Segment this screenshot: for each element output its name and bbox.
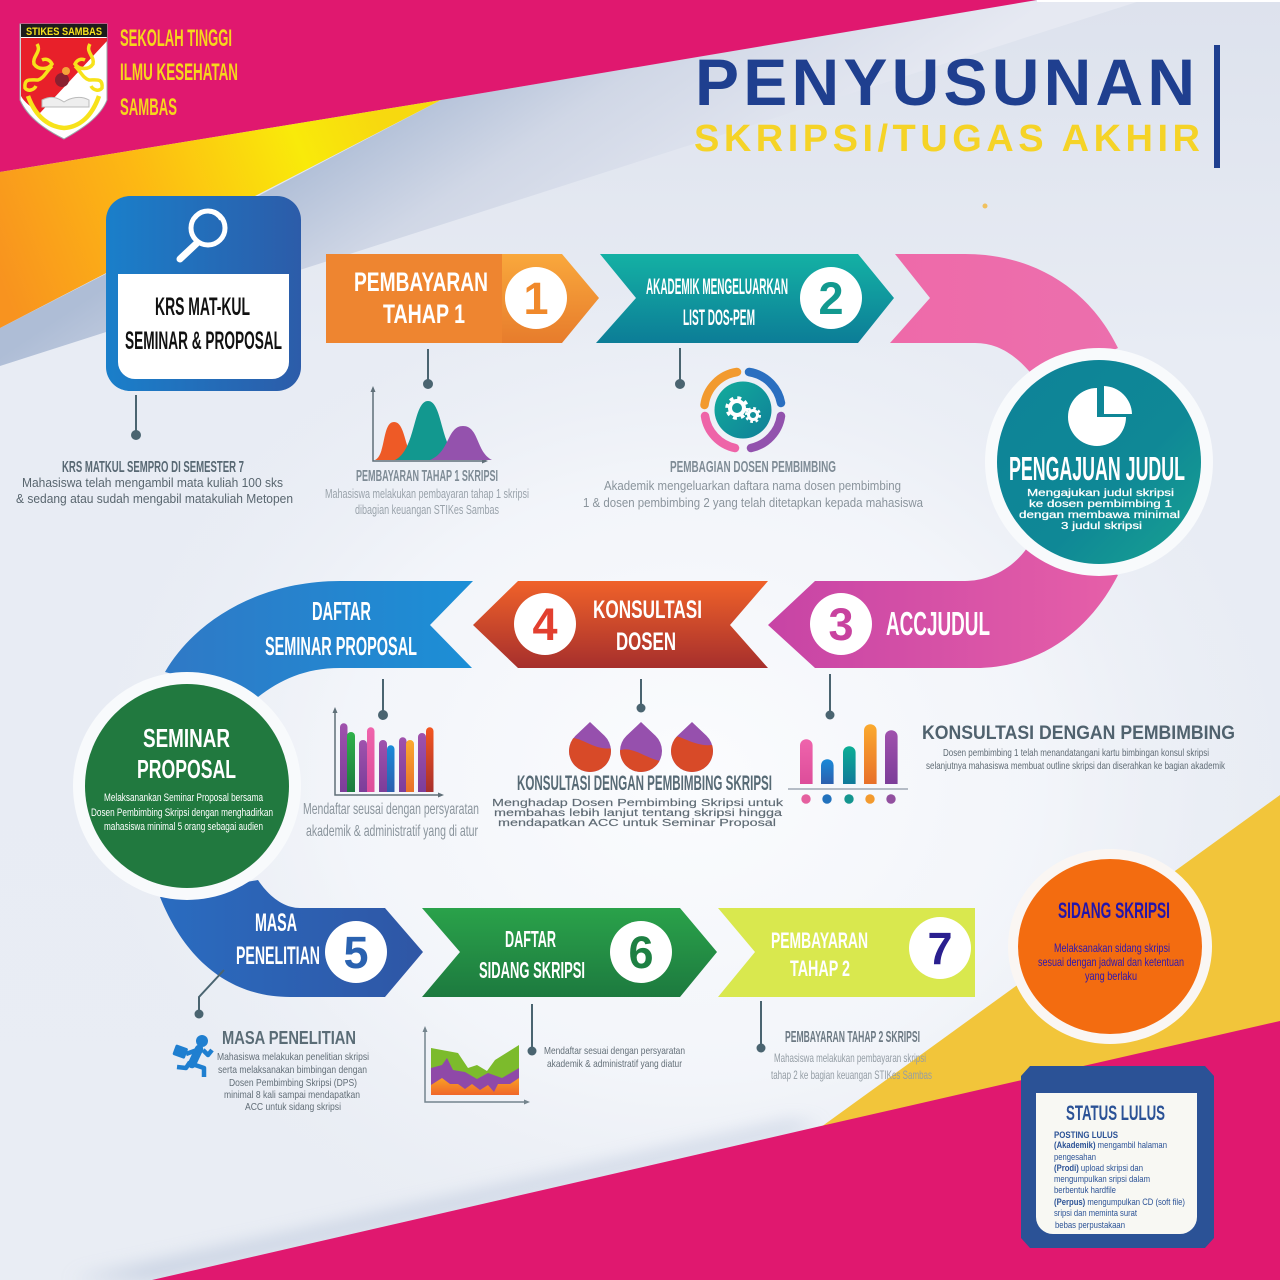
panel: status lulus: (Akademik) mengambil halaman: [1054, 1140, 1167, 1151]
text: pembayaran tahap 2: Mahasiswa melakukan pembayaran skripsi: [774, 1051, 926, 1065]
bottom yellow wedge: [821, 795, 1280, 1127]
circle: seminar proposal: Dosen Pembimbing Skripsi dengan menghadirkan: [91, 807, 273, 819]
text: masa penelitian: serta melaksanakan bimbingan dengan: [218, 1064, 367, 1076]
ribbon: step 5: PENELITIAN: [236, 942, 320, 970]
top yellow wedge: [0, 100, 441, 328]
arrow: step 4: 4: [532, 599, 558, 650]
text: pembayaran tahap 2: PEMBAYARAN TAHAP 2 SKRIPSI: [785, 1029, 920, 1046]
arrow: step 4: KONSULTASI: [593, 596, 702, 624]
arrow: step 2: 2: [818, 273, 844, 324]
circle: pengajuan judul: ke dosen pembimbing 1: [1029, 499, 1173, 510]
text: pembagian dosen pembimbing: [583, 459, 924, 510]
chart: stacked area: [422, 1004, 536, 1104]
school name: SAMBAS: [120, 94, 177, 121]
text: konsultasi dengan pembimbing skripsi: Menghadap Dosen Pembimbing Skripsi untuk: [492, 798, 784, 809]
text: daftar sidang: Mendaftar sesuai dengan persyaratan: [544, 1045, 685, 1057]
leader: pembayaran tahap 2: [756, 1001, 766, 1052]
circle: pengajuan judul: 3 judul skripsi: [1061, 521, 1142, 532]
text: masa penelitian: [217, 1028, 369, 1113]
panel: status lulus: mengumpulkan sripsi dalam: [1054, 1174, 1150, 1185]
arrow: step 6: 6: [628, 927, 654, 978]
icon: magnifier: [180, 211, 225, 259]
school name: SEKOLAH TINGGI: [120, 25, 232, 52]
ribbon: step 5: MASA: [255, 909, 297, 937]
arrow: step 7: PEMBAYARAN: [771, 928, 868, 953]
arrow: step 7: [718, 908, 975, 997]
text: KRS description: Mahasiswa telah mengambil mata kuliah 100 sks: [22, 475, 283, 490]
text: konsultasi dengan pembimbing skripsi: [492, 772, 784, 829]
school name: [120, 25, 238, 121]
text: masa penelitian: MASA PENELITIAN: [222, 1028, 356, 1048]
panel: status lulus: POSTING LULUS: [1054, 1130, 1118, 1141]
chart: grouped bars: [332, 679, 444, 798]
panel: status lulus: (Perpus) mengumpulkan CD (soft file): [1054, 1197, 1185, 1208]
top magenta banner: [0, 0, 1037, 172]
arrow: step 6: [422, 908, 717, 997]
arrow: step 1: PEMBAYARAN: [354, 267, 488, 297]
arrow: step 1: [326, 254, 599, 343]
panel: status lulus: berbentuk hardfile: [1054, 1185, 1116, 1196]
circle: pengajuan judul: [985, 348, 1213, 576]
icon: running person: [172, 1035, 212, 1077]
panel: status lulus: [1021, 1066, 1214, 1248]
circle: sidang skripsi: [1008, 849, 1212, 1044]
ribbon: lower pink curve with step 3: [768, 548, 1118, 668]
text: pembayaran tahap 1: PEMBAYARAN TAHAP 1 SKRIPSI: [356, 468, 498, 485]
panel: KRS card: SEMINAR & PROPOSAL: [125, 327, 282, 355]
ribbon: upper pink curve: [890, 254, 1118, 385]
chart: bell curves: [370, 349, 492, 464]
logo: STIKes Sambas shield: STIKES SAMBAS: [26, 26, 102, 38]
ribbon: lower pink curve with step 3: ACCJUDUL: [886, 605, 990, 642]
text: pembayaran tahap 1: dibagian keuangan STIKes Sambas: [355, 503, 499, 517]
ribbon: step 5: 5: [343, 927, 369, 978]
leader: masa penelitian: [194, 970, 224, 1018]
text: pembagian dosen pembimbing: PEMBAGIAN DOSEN PEMBIMBING: [670, 459, 836, 476]
circle: pengajuan judul: Mengajukan judul skripsi: [1027, 488, 1174, 499]
arrow: step 7: TAHAP 2: [790, 956, 850, 981]
circle: sidang skripsi: yang berlaku: [1085, 969, 1137, 983]
circle: seminar proposal: Melaksanankan Seminar Proposal bersama: [104, 792, 264, 804]
panel: status lulus: bebas perpustakaan: [1055, 1220, 1125, 1231]
text: KRS description: & sedang atau sudah mengabil matakuliah Metopen: [16, 491, 293, 506]
arrow: step 1: TAHAP 1: [383, 299, 465, 329]
ribbon: step 5: [160, 880, 423, 997]
text: daftar seminar: [303, 801, 479, 840]
text: pembayaran tahap 2: tahap 2 ke bagian keuangan STIKes Sambas: [771, 1068, 932, 1082]
text: daftar sidang: [544, 1045, 685, 1070]
arrow: step 2: AKADEMIK MENGELUARKAN: [646, 274, 788, 299]
circle: seminar proposal: [73, 672, 301, 900]
panel: status lulus: (Prodi) upload skripsi dan: [1054, 1163, 1143, 1174]
ribbon: daftar seminar proposal: [165, 581, 473, 697]
title: [694, 45, 1220, 168]
icon: gear ring: [675, 348, 781, 448]
text: konsultasi dengan pembimbing: KONSULTASI DENGAN PEMBIMBING: [922, 723, 1235, 744]
circle: seminar proposal: PROPOSAL: [137, 754, 236, 784]
circle: seminar proposal: SEMINAR: [143, 723, 230, 753]
circle: sidang skripsi: SIDANG SKRIPSI: [1058, 898, 1170, 923]
ribbon: daftar seminar proposal: SEMINAR PROPOSAL: [265, 631, 417, 661]
text: KRS description: KRS MATKUL SEMPRO DI SEMESTER 7: [62, 459, 244, 476]
icon: three drops: [565, 679, 717, 775]
panel: status lulus: sripsi dan meminta surat: [1054, 1208, 1137, 1219]
shadow above bottom banner: [70, 1122, 822, 1280]
text: konsultasi dengan pembimbing skripsi: membahas lebih lanjut tentang skripsi hingga: [494, 808, 783, 819]
icon: pie chart: [1068, 386, 1132, 446]
text: daftar seminar: Mendaftar seusai dengan persyaratan: [303, 801, 479, 818]
arrow: step 7: 7: [927, 923, 953, 974]
text: masa penelitian: Mahasiswa melakukan penelitian skripsi: [217, 1051, 369, 1063]
text: pembayaran tahap 1: [325, 468, 529, 517]
title: SKRIPSI/TUGAS AKHIR: [694, 118, 1200, 160]
circle: pengajuan judul: dengan membawa minimal: [1019, 510, 1180, 521]
text: masa penelitian: Dosen Pembimbing Skripsi (DPS): [229, 1077, 357, 1089]
panel: KRS card: [106, 196, 301, 391]
circle: seminar proposal: mahasiswa minimal 5 orang sebagai audien: [104, 821, 263, 833]
ribbon: lower pink curve with step 3: 3: [828, 599, 854, 650]
arrow: step 2: [596, 254, 894, 343]
arrow: step 1: 1: [523, 273, 549, 324]
chart: five bars: [788, 674, 908, 804]
text: masa penelitian: ACC untuk sidang skripsi: [245, 1101, 341, 1113]
text: konsultasi dengan pembimbing skripsi: mendapatkan ACC untuk Seminar Proposal: [498, 818, 776, 829]
text: daftar seminar: akademik & administratif yang di atur: [306, 823, 478, 840]
circle: sidang skripsi: Melaksanakan sidang skripsi: [1054, 941, 1170, 955]
panel: status lulus: STATUS LULUS: [1066, 1102, 1165, 1125]
text: KRS description: [16, 459, 293, 506]
text: konsultasi dengan pembimbing: [922, 723, 1235, 772]
KRS leader: [131, 395, 141, 440]
arrow: step 6: DAFTAR: [505, 926, 556, 952]
arrow: step 6: SIDANG SKRIPSI: [479, 957, 585, 983]
arrow: step 4: DOSEN: [616, 628, 676, 656]
school name: ILMU KESEHATAN: [120, 59, 238, 86]
logo: STIKes Sambas shield: [20, 24, 107, 139]
text: konsultasi dengan pembimbing skripsi: KONSULTASI DENGAN PEMBIMBING SKRIPSI: [517, 772, 772, 795]
text: daftar sidang: akademik & administratif yang diatur: [547, 1058, 682, 1070]
panel: status lulus: pengesahan: [1054, 1152, 1096, 1163]
text: pembagian dosen pembimbing: 1 & dosen pembimbing 2 yang telah ditetapkan kepada mahasiswa: [583, 495, 924, 510]
text: pembayaran tahap 2: [771, 1029, 932, 1082]
text: masa penelitian: minimal 8 kali sampai mendapatkan: [224, 1089, 360, 1101]
arrow: step 2: LIST DOS-PEM: [683, 305, 755, 330]
title: PENYUSUNAN: [695, 45, 1195, 119]
panel: KRS card: KRS MAT-KUL: [155, 293, 250, 321]
bottom magenta banner: [152, 1021, 1280, 1280]
arrow: step 4: [473, 581, 768, 668]
ribbon: daftar seminar proposal: DAFTAR: [312, 596, 371, 626]
text: pembagian dosen pembimbing: Akademik mengeluarkan daftara nama dosen pembimbing: [604, 478, 901, 493]
circle: sidang skripsi: sesuai dengan jadwal dan ketentuan: [1038, 955, 1184, 969]
text: pembayaran tahap 1: Mahasiswa melakukan pembayaran tahap 1 skripsi: [325, 487, 529, 501]
